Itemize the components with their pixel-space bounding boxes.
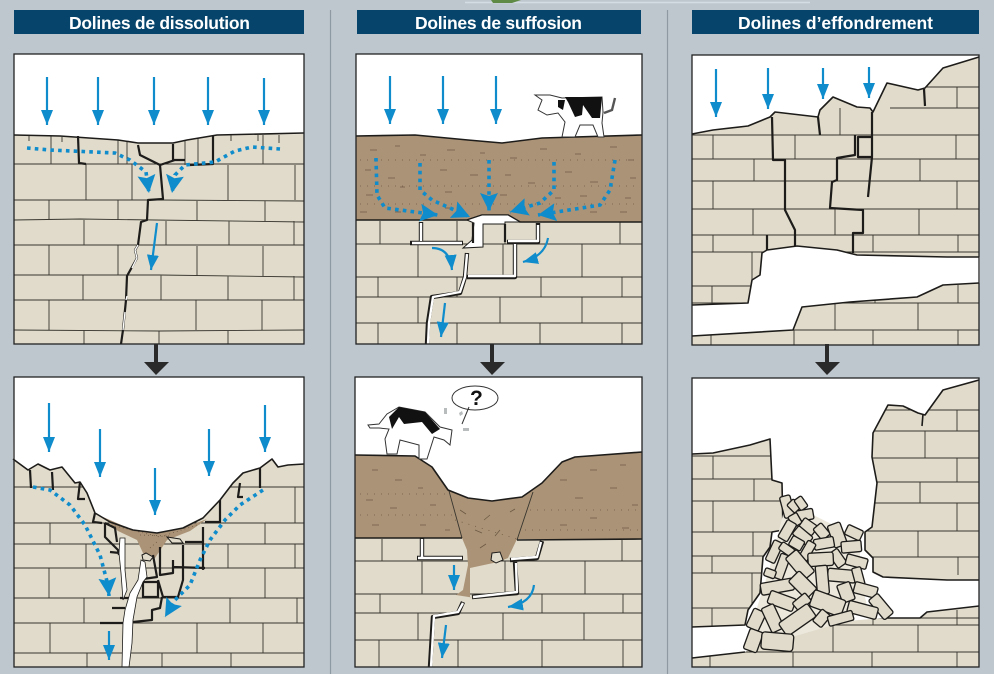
arrow in crack [151,223,157,270]
dotted flow arrows [27,147,280,193]
sky [692,55,979,134]
heading: Dolines de suffosion [357,10,641,34]
void [692,378,979,658]
dotted flow arrows [33,487,263,617]
panel: collapse, initial stage [692,55,980,345]
panel: collapse, late stage [692,378,979,667]
surface and cavity outlines [692,57,979,336]
fractures [767,89,925,253]
void outline [692,380,979,658]
panel: dissolution, initial stage [14,54,304,344]
rock surface line and joints [14,133,304,165]
sky and soil layer [356,54,642,222]
rain arrows [49,403,265,660]
white cavity and cracks [410,215,538,344]
arrow: stage transition 3 [815,344,840,375]
icon: cow with question bubble: ? [470,387,483,410]
crack [121,165,163,344]
heading: Dolines d'effondrement: Dolines d’effondrement [738,13,933,33]
rain arrows [47,77,264,125]
fine sediment at the bottom of the doline [103,517,207,558]
sky and soil with funnel [355,377,642,598]
rock surface line [13,459,304,533]
icon: cow with question bubble [368,386,498,459]
rain arrows [390,76,496,124]
icon: cow [535,95,615,137]
dotted flow arrows [376,158,615,217]
panel: dissolution, late stage [13,377,304,667]
rain arrows [716,67,869,117]
collapsed rubble [743,495,894,653]
heading: Dolines de suffosion: Dolines de suffosion [415,13,582,33]
heading: Dolines de dissolution: Dolines de dissolution [69,13,250,33]
heading: Dolines de dissolution [14,10,304,34]
heading: Dolines d'effondrement [692,10,979,34]
white cracks [417,538,542,667]
panel: suffosion, late stage [355,377,642,667]
panel: suffosion, initial stage [356,54,642,344]
enlarged cracks and conduit [30,468,260,667]
arrow: stage transition 1 [144,344,169,375]
arrow: stage transition 2 [480,344,505,375]
flow arrows [442,565,534,658]
curved flow arrows [432,238,548,337]
underground cavity [692,246,980,336]
